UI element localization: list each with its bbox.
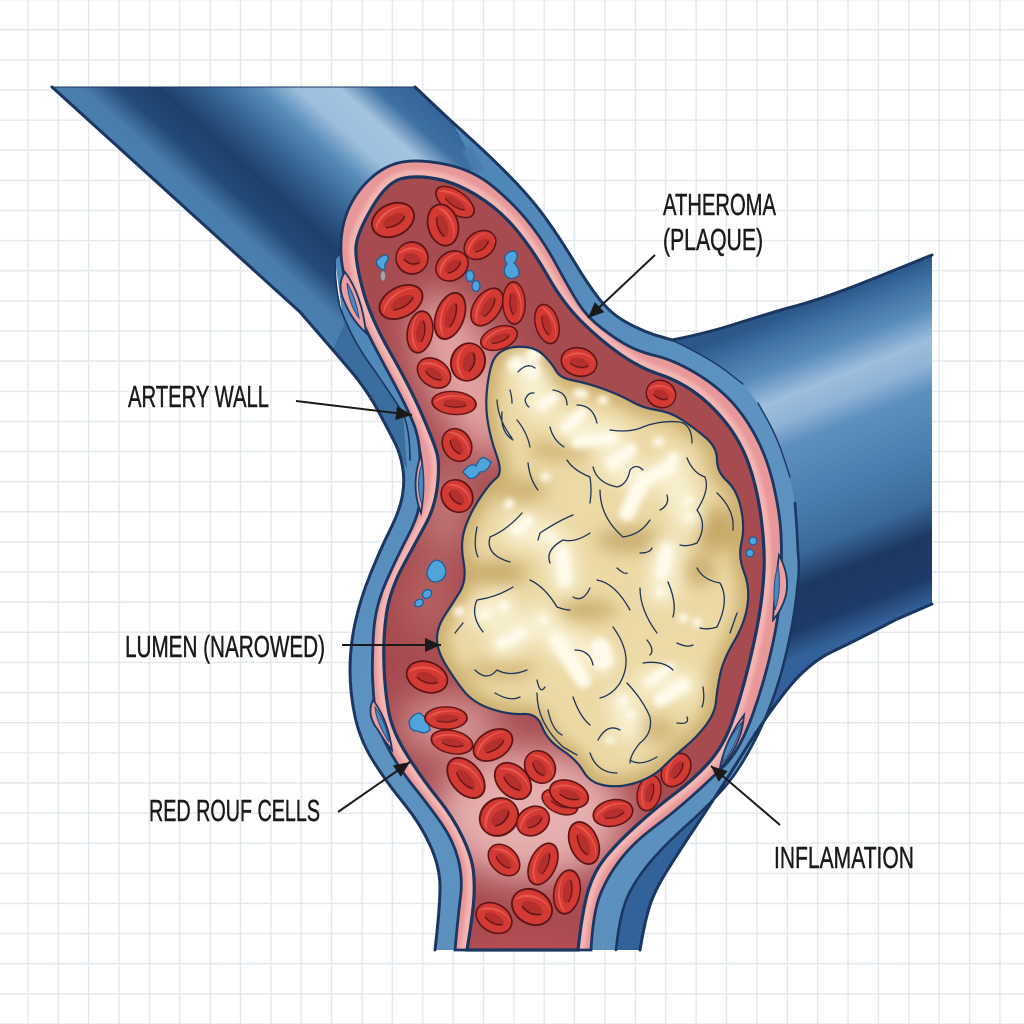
arrow: inflammation [711,766,780,825]
plaque shading [437,347,748,786]
plaque crease lines [455,366,737,773]
label: atheroma (plaque): (PLAQUE) [663,222,763,257]
artery wall band [335,120,799,950]
atheroma plaque [437,347,748,786]
plaque highlight glow [483,365,688,730]
label: inflamation: INFLAMATION [774,840,914,875]
vessel edge blend [466,148,480,172]
label: atheroma (plaque): ATHEROMA [663,187,776,222]
plaque highlights [458,354,697,740]
arrow: red cells [338,762,410,812]
label: lumen (narowed): LUMEN (NAROWED) [125,629,325,664]
arrow: lumen [342,644,441,646]
vessel taper shading [333,322,407,470]
label: artery wall: ARTERY WALL [128,379,269,414]
inflammation sites in artery wall [340,272,787,768]
right branch vessel [616,255,932,950]
label: red rouf cells: RED ROUF CELLS [149,793,320,828]
red blood cells [366,180,697,940]
upper left vessel [52,87,478,470]
platelets [376,251,757,733]
intima pink layer [341,161,782,950]
lumen [356,177,764,989]
arrow: artery wall [296,401,412,415]
arrow: atheroma [588,255,655,318]
vessel outlines [52,87,932,950]
label: atheroma (plaque) [663,187,776,257]
